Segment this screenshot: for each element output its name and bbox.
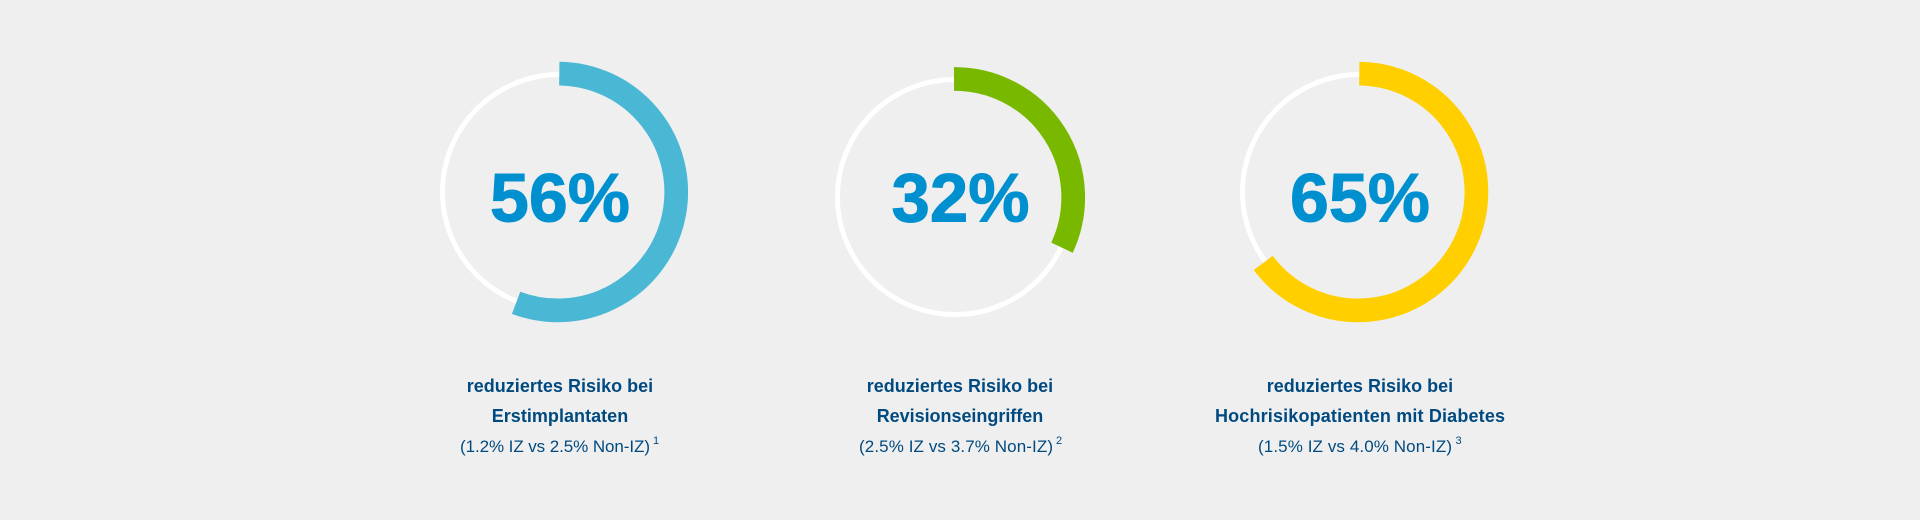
label: reduziertes Risiko bei Revisionseingriffen: reduziertes Risiko bei [867, 376, 1053, 396]
ring chart: 56% [442, 74, 678, 310]
stat: 32%: 32% [892, 160, 1030, 236]
ring chart: 65% [1242, 74, 1478, 310]
label: reduziertes Risiko bei Erstimplantaten: Erstimplantaten [492, 406, 628, 426]
label: reduziertes Risiko bei Hochrisikopatienten mit Diabetes: (1.5% IZ vs 4.0% Non-IZ) [1258, 437, 1452, 456]
ring chart: 32% [838, 79, 1073, 314]
stat: 65%: 65% [1290, 160, 1430, 236]
panel: Revisionseingriffen [838, 79, 1073, 456]
label: reduziertes Risiko bei Erstimplantaten: reduziertes Risiko bei [467, 376, 653, 396]
label: reduziertes Risiko bei Revisionseingriffen: Revisionseingriffen [877, 406, 1043, 426]
stat: 56%: 56% [490, 160, 630, 236]
label: reduziertes Risiko bei Hochrisikopatienten mit Diabetes: reduziertes Risiko bei [1267, 376, 1453, 396]
label: reduziertes Risiko bei Revisionseingriffen: (2.5% IZ vs 3.7% Non-IZ) [859, 437, 1053, 456]
label: reduziertes Risiko bei Hochrisikopatienten mit Diabetes: 3 [1456, 435, 1462, 447]
panel: Erstimplantaten [442, 74, 678, 456]
label: reduziertes Risiko bei Revisionseingriffen: 2 [1056, 435, 1062, 447]
label: reduziertes Risiko bei Hochrisikopatienten mit Diabetes: Hochrisikopatienten mit Diabetes [1215, 406, 1505, 426]
label: reduziertes Risiko bei Hochrisikopatienten mit Diabetes [1215, 376, 1505, 456]
label: reduziertes Risiko bei Erstimplantaten: (1.2% IZ vs 2.5% Non-IZ) [460, 437, 650, 456]
label: reduziertes Risiko bei Erstimplantaten [460, 376, 659, 456]
label: reduziertes Risiko bei Revisionseingriffen [859, 376, 1062, 456]
label: reduziertes Risiko bei Erstimplantaten: 1 [653, 435, 659, 447]
panel: Hochrisikopatienten mit Diabetes [1215, 74, 1505, 456]
